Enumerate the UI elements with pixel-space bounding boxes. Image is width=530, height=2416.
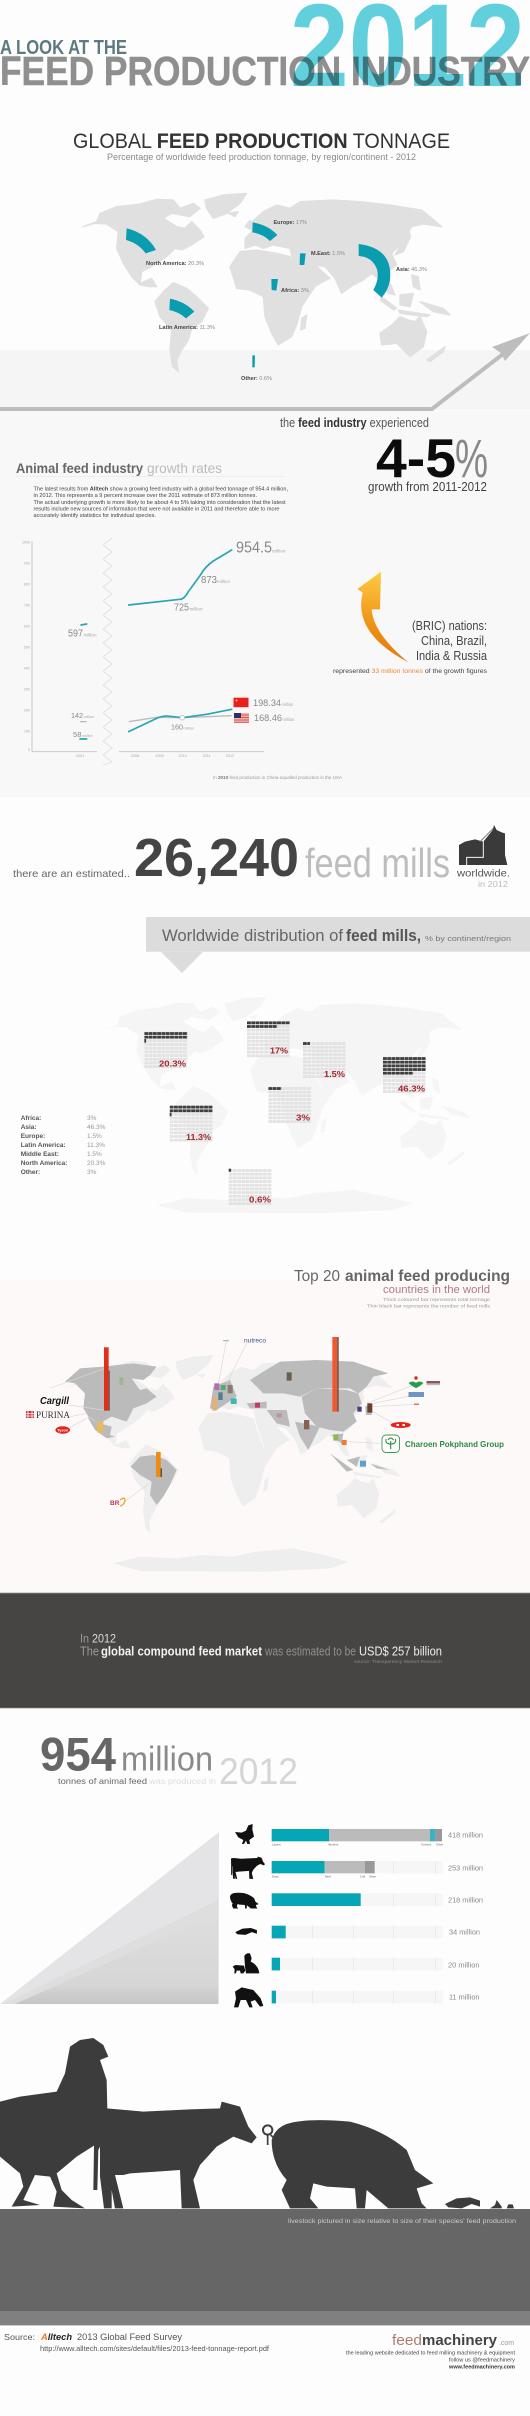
- value labels: million: [184, 726, 194, 730]
- icon: USA flag: [234, 713, 249, 723]
- region labels: [146, 220, 427, 382]
- graphic: large livestock silhouettes: [0, 2038, 514, 2208]
- headline: 26,240 feed mills: worldwide.: [456, 868, 510, 880]
- banner: worldwide distribution: % by continent/region: [425, 934, 511, 943]
- footer: feedmachinery brand: feed: [392, 2332, 422, 2349]
- y axis labels: 800: [24, 582, 30, 586]
- section background: growth rates: [0, 411, 530, 797]
- highlighted countries: [65, 1360, 390, 1505]
- headline: 954 million in 2012: tonnes of animal feed: [58, 1777, 147, 1786]
- cow: [93, 2102, 257, 2208]
- y axis labels: 900: [24, 562, 30, 566]
- headline: 26,240 feed mills: feed mills: [305, 840, 450, 886]
- chart footnote: In 2010 feed production in China equalled production in the USA: [213, 775, 342, 780]
- panel: global compound feed market: [0, 1592, 530, 1708]
- chart: feed by species: [272, 1829, 483, 2003]
- bar tracks: [272, 1861, 443, 2003]
- logo: Charoen Pokphand Group: [382, 1435, 504, 1452]
- region labels: Africa: 3%: [281, 288, 309, 294]
- sub-segment labels: Dairy: [272, 1874, 279, 1878]
- icon: fish: [235, 1928, 257, 1935]
- heading: top 20 animal feed producing: animal feed producing: [345, 1268, 510, 1285]
- heading: animal feed industry growth rates: [16, 461, 285, 476]
- logo: blue company mark: [408, 1392, 424, 1397]
- logo: Charoen Pokphand Group: Charoen Pokphand Group: [405, 1439, 504, 1449]
- panel: header title: [0, 0, 530, 112]
- band behind lower part of first map: [0, 350, 530, 410]
- value labels: 873: [201, 575, 217, 586]
- logo: Cargill: Cargill: [40, 1395, 70, 1407]
- text block: growth explanation: results include new sources of information that were not available in 2011 and therefore able to more: [34, 506, 280, 512]
- values: [448, 1832, 483, 2002]
- logo: New Hope: [408, 1376, 440, 1388]
- value labels: million: [217, 579, 230, 584]
- series: world total: [80, 550, 232, 739]
- legend: feed mills by region: Middle East:: [21, 1151, 59, 1158]
- text block: growth explanation: The latest results from Alltech show a growing feed industry with a global feed tonnage of 954.4 million,: [34, 486, 289, 492]
- footer: feedmachinery brand: machinery: [422, 2332, 498, 2349]
- heading: a look at the: A LOOK AT THE: [0, 37, 127, 59]
- y axis labels: 500: [24, 646, 30, 650]
- value labels: 198.34: [253, 698, 281, 708]
- bar: fish 34 million: [272, 1926, 286, 1938]
- value labels: million: [272, 549, 286, 555]
- heading: top 20 animal feed producing: countries in the world: [383, 1284, 490, 1296]
- value labels: 160: [171, 722, 183, 732]
- sub-segment labels: Other: [436, 1842, 443, 1846]
- y axis labels: 400: [24, 666, 30, 670]
- headline: 954 million in 2012: [40, 1728, 298, 1792]
- chart axes: [32, 541, 264, 752]
- values: 418 million: [448, 1832, 483, 1839]
- banner: worldwide distribution: Worldwide distribution of: [162, 927, 343, 945]
- map: top 20 producing countries: [26, 1337, 504, 1572]
- tonnage bars: other countries: [97, 1372, 372, 1467]
- bar: cattle 253 million: [272, 1861, 375, 1873]
- text block: growth explanation: accurately identify statistics for individual species.: [34, 513, 156, 519]
- heading: top 20 animal feed producing: Top 20: [294, 1268, 340, 1285]
- callout: BRIC nations: (BRIC) nations:: [412, 619, 487, 633]
- legend: feed mills by region: 11.3%: [87, 1142, 105, 1149]
- callout: 4-5% growth: the feed industry experienced: [280, 416, 429, 430]
- values: 11 million: [449, 1995, 480, 2002]
- callout: BRIC nations: [333, 619, 488, 675]
- waffle: Africa: [268, 1087, 311, 1123]
- callout: 4-5% growth: [280, 416, 488, 494]
- logo: Nutreco: nutreco: [244, 1338, 267, 1344]
- percent labels: 17%: [270, 1046, 288, 1056]
- logo: Tyson: [55, 1426, 70, 1434]
- y axis labels: 300: [24, 688, 30, 692]
- sub-segment labels: [272, 1842, 443, 1878]
- waffle: Other: [229, 1169, 272, 1205]
- percent labels: [159, 1046, 425, 1205]
- value labels: million: [82, 734, 93, 738]
- region labels: M.East: 1.5%: [311, 251, 345, 257]
- headline: 954 million in 2012: 2012: [219, 1751, 298, 1792]
- value labels: million: [282, 717, 295, 722]
- panel: global compound feed market: was estimated to be: [264, 1644, 356, 1658]
- text block: growth explanation: [34, 486, 289, 519]
- map: feed tonnage by region: [83, 193, 450, 382]
- banner: worldwide distribution: [146, 917, 530, 973]
- y axis labels: 1000: [22, 540, 30, 544]
- region labels: Latin America: 11.3%: [159, 325, 215, 331]
- heading: animal feed industry growth rates: Animal feed industry: [16, 461, 143, 476]
- callout: 4-5% growth: %: [455, 429, 488, 489]
- values: 20 million: [448, 1962, 480, 1969]
- waffle: Middle East: [303, 1042, 346, 1078]
- legend: feed mills by region: North America:: [21, 1160, 67, 1167]
- values: 34 million: [449, 1929, 480, 1936]
- legend: feed mills by region: 1.5%: [87, 1133, 102, 1140]
- headline: 954 million in 2012: 954: [40, 1728, 116, 1781]
- headline: 954 million in 2012: million: [121, 1741, 213, 1779]
- percent labels: 46.3%: [398, 1084, 425, 1094]
- section background: top 20: [0, 1280, 530, 1593]
- sub-segment labels: Beef: [325, 1874, 331, 1878]
- y axis labels: 0: [28, 748, 30, 752]
- icon: horse: [234, 1987, 263, 2007]
- legend: feed mills by region: [21, 1115, 106, 1176]
- callout: 4-5% growth: growth from 2011-2012: [368, 480, 487, 494]
- value labels: 954.5: [236, 540, 272, 557]
- world map base: [83, 193, 450, 372]
- caption: livestock pictured in size relative to size of their species' feed production: [288, 2218, 516, 2225]
- value labels: 725: [174, 602, 189, 614]
- legend: feed mills by region: 1.5%: [87, 1151, 102, 1158]
- panel: global compound feed market: USD$ 257 billion: [359, 1644, 442, 1658]
- value labels: million: [282, 702, 294, 707]
- heading: animal feed industry growth rates: growth rates: [147, 461, 222, 476]
- legend: feed mills by region: 3%: [87, 1169, 97, 1176]
- bar: pets 20 million: [272, 1958, 280, 1970]
- legend: feed mills by region: Europe:: [21, 1133, 45, 1140]
- panel: global compound feed market: The: [80, 1644, 99, 1658]
- sub-segment labels: Other: [369, 1874, 376, 1878]
- heading: global feed production tonnage: [73, 130, 450, 163]
- heading: top 20 animal feed producing: Thick coloured bar represents total tonnage: [383, 1297, 491, 1302]
- percent labels: 3%: [296, 1112, 310, 1122]
- panel: global compound feed market: In 2012: [80, 1634, 116, 1646]
- waffle: North America: [144, 1032, 187, 1068]
- y axis labels: 200: [24, 708, 30, 712]
- sub-segment labels: Broilers: [328, 1842, 339, 1846]
- axis break zigzag: [103, 538, 112, 765]
- value labels: 168.46: [254, 713, 282, 723]
- map: feed mills waffle grids: [103, 997, 470, 1213]
- value labels: 597: [68, 629, 83, 640]
- footer: source: [4, 2332, 270, 2353]
- graphic: rising grey wedge: [0, 1832, 219, 2004]
- x axis labels: 2011: [203, 754, 211, 758]
- values: 253 million: [448, 1866, 483, 1873]
- logo: small European mark: [223, 1340, 229, 1341]
- headline: 26,240 feed mills: there are an estimated..: [13, 868, 130, 880]
- value labels: 142: [71, 711, 83, 720]
- line chart: feed tonnage over time: [22, 538, 295, 765]
- region labels: Asia: 46.3%: [396, 267, 427, 273]
- world map base: [63, 1355, 401, 1572]
- footer: feedmachinery brand: .com: [499, 2340, 514, 2347]
- icon: China flag: [234, 698, 248, 707]
- connector lines to company logos: [50, 1340, 415, 1500]
- footer: feedmachinery brand: the leading website dedicated to feed milling machinery & equipment: [346, 2350, 516, 2356]
- headline: 26,240 feed mills: 26,240: [134, 828, 299, 888]
- y axis labels: 100: [24, 730, 30, 734]
- bar: horses 11 million: [272, 1991, 276, 2003]
- headline: 954 million in 2012: was produced in: [148, 1777, 216, 1786]
- y axis labels: 600: [24, 624, 30, 628]
- logo: small red mark: [414, 1404, 419, 1405]
- icon: pig: [230, 1893, 259, 1909]
- waffle: Latin America: [170, 1105, 213, 1142]
- x axis labels: [76, 754, 234, 758]
- value labels: [68, 540, 295, 739]
- world map base: [103, 997, 470, 1213]
- footer: feedmachinery brand: follow us @feedmachinery: [449, 2358, 516, 2364]
- heading: global feed production tonnage: GLOBAL FEED PRODUCTION TONNAGE: [73, 130, 450, 153]
- callout: BRIC nations: represented 33 million tonnes of the growth figures: [333, 668, 488, 675]
- icon: cow: [231, 1857, 265, 1879]
- legend: feed mills by region: Other:: [21, 1169, 40, 1176]
- percent labels: 20.3%: [159, 1058, 186, 1068]
- legend: feed mills by region: 46.3%: [87, 1124, 106, 1131]
- arrow: rising growth line: [0, 333, 530, 409]
- x axis labels: 2012: [226, 754, 234, 758]
- x axis labels: 2010: [178, 754, 187, 758]
- subheading: Percentage of worldwide feed production tonnage, by region/continent - 2012: [107, 152, 416, 163]
- fish: [445, 2197, 480, 2208]
- percent labels: 0.6%: [249, 1195, 272, 1205]
- text block: growth explanation: The actual underlying growth is more likely to be about 4 to 5% taking into consideration that the latest: [34, 500, 286, 506]
- legend: feed mills by region: 3%: [87, 1115, 97, 1122]
- banner: worldwide distribution: feed mills,: [346, 927, 421, 945]
- y axis labels: [22, 540, 30, 752]
- heading: top 20 animal feed producing: Thin black bar represents the number of feed mills: [367, 1304, 491, 1308]
- sub-segment labels: Calf: [360, 1874, 365, 1878]
- tonnage bars: USA, China, Brazil: [104, 1337, 339, 1477]
- footer: feedmachinery brand: www.feedmachinery.com: [448, 2364, 516, 2370]
- callout: 4-5% growth: 4-5: [376, 427, 456, 489]
- values: 218 million: [448, 1897, 483, 1904]
- series: USA: [80, 716, 232, 722]
- footer: source: http://www.alltech.com/sites/default/files/2013-feed-tonnage-report.pdf: [40, 2344, 270, 2353]
- callout: BRIC nations: India & Russia: [416, 649, 487, 663]
- percent labels: 11.3%: [186, 1132, 211, 1142]
- logo: red oval: [391, 1422, 411, 1428]
- panel: global compound feed market: global compound feed market: [101, 1644, 263, 1658]
- logo: Tyson: Tyson: [57, 1428, 69, 1432]
- y axis labels: 700: [24, 604, 30, 608]
- legend: feed mills by region: Latin America:: [21, 1142, 66, 1149]
- series: China: [129, 709, 232, 732]
- bar: poultry 418 million: [272, 1829, 442, 1841]
- value labels: 58: [73, 730, 82, 739]
- callout: BRIC nations: China, Brazil,: [421, 634, 487, 648]
- legend: feed mills by region: Asia:: [21, 1124, 37, 1131]
- value labels: million: [84, 715, 94, 719]
- pig: [263, 2120, 433, 2208]
- sub-segment labels: Layers: [272, 1842, 281, 1846]
- x axis labels: 2009: [155, 754, 164, 758]
- dog and horse, tiny: [490, 2200, 514, 2208]
- waffle: Asia: [383, 1057, 426, 1093]
- footer: feedmachinery brand: [346, 2332, 516, 2370]
- marker: 2010 crossover: [180, 715, 185, 720]
- legend: feed mills by region: Africa:: [21, 1115, 41, 1122]
- value labels: million: [84, 633, 97, 638]
- panel: global compound feed market: source: Transparency Market Research: [354, 1659, 443, 1664]
- icon: feed mill: [459, 825, 507, 865]
- waffle: Europe: [247, 1021, 290, 1058]
- value labels: million: [190, 606, 203, 612]
- panel: band under livestock: [0, 2209, 530, 2326]
- icon: dog and cat: [233, 1953, 259, 1973]
- headline: 26,240 feed mills: [13, 828, 510, 889]
- logo: Purina: PURINA: [36, 1410, 70, 1420]
- sub-segment labels: Turkeys: [421, 1842, 432, 1846]
- text block: growth explanation: in 2012. This represents a 9 percent increase over the 2011 estimate of 873 million tonnes.: [34, 493, 257, 499]
- region labels: Europe: 17%: [274, 220, 307, 226]
- arrow: orange BRIC growth: [357, 572, 408, 662]
- region labels: Other: 0.6%: [241, 376, 272, 382]
- x axis labels: 2008: [131, 754, 139, 758]
- logo: BRF: [110, 1498, 125, 1507]
- headline: 26,240 feed mills: in 2012: [478, 880, 509, 889]
- footer: source: Source:: [4, 2332, 35, 2342]
- bar: pigs 218 million: [272, 1893, 361, 1906]
- logo: BRF: BR: [110, 1500, 120, 1507]
- legend: feed mills by region: 20.3%: [87, 1160, 106, 1167]
- heading: top 20 animal feed producing: [294, 1268, 510, 1308]
- teal region arcs: [126, 222, 390, 367]
- region labels: North America: 20.3%: [146, 261, 204, 267]
- percent labels: 1.5%: [324, 1069, 345, 1079]
- footer: source: 2013 Global Feed Survey: [77, 2332, 182, 2342]
- logo: Alltech: Alltech: [40, 2332, 72, 2343]
- x axis labels: 2001: [76, 754, 84, 758]
- icon: chicken: [235, 1824, 254, 1844]
- chicken: [0, 2038, 108, 2208]
